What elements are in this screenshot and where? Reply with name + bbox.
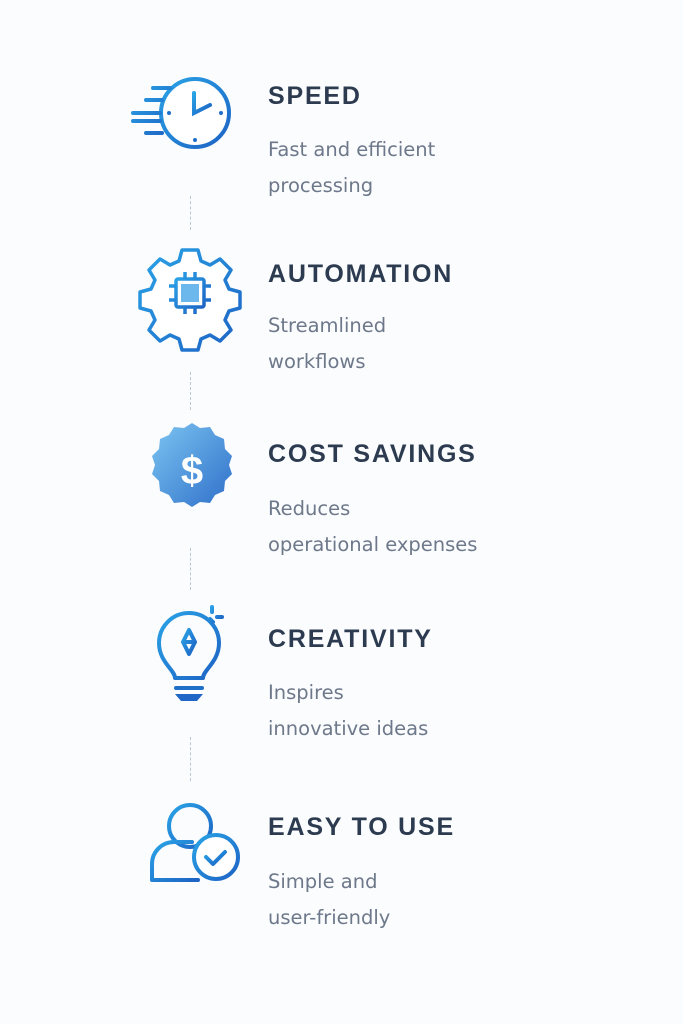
icon: user check xyxy=(150,803,240,882)
title: cost savings: COST SAVINGS xyxy=(268,440,477,468)
text: easy to use xyxy=(268,870,390,929)
text: speed: Fast and efficient xyxy=(268,138,435,161)
title: creativity: CREATIVITY xyxy=(268,625,433,653)
text: easy to use: user-friendly xyxy=(268,906,390,929)
icon: dollar badge: $ xyxy=(181,449,203,493)
icon: clock xyxy=(131,77,231,149)
title: easy to use: EASY TO USE xyxy=(268,813,455,841)
title: automation: AUTOMATION xyxy=(268,260,453,288)
text: automation xyxy=(268,314,386,373)
text: creativity: Inspires xyxy=(268,681,344,704)
icon: lightbulb xyxy=(157,605,224,701)
text: automation: workflows xyxy=(268,350,366,373)
text: speed xyxy=(268,138,435,197)
icon: dollar badge xyxy=(152,423,232,507)
text: cost savings: operational expenses xyxy=(268,533,477,556)
text: cost savings xyxy=(268,497,477,556)
text: creativity: innovative ideas xyxy=(268,717,428,740)
icon: gear chip xyxy=(138,248,242,352)
title: speed: SPEED xyxy=(268,82,362,110)
text: easy to use: Simple and xyxy=(268,870,377,893)
text: creativity xyxy=(268,681,428,740)
text: speed: processing xyxy=(268,174,373,197)
text: cost savings: Reduces xyxy=(268,497,350,520)
text: automation: Streamlined xyxy=(268,314,386,337)
